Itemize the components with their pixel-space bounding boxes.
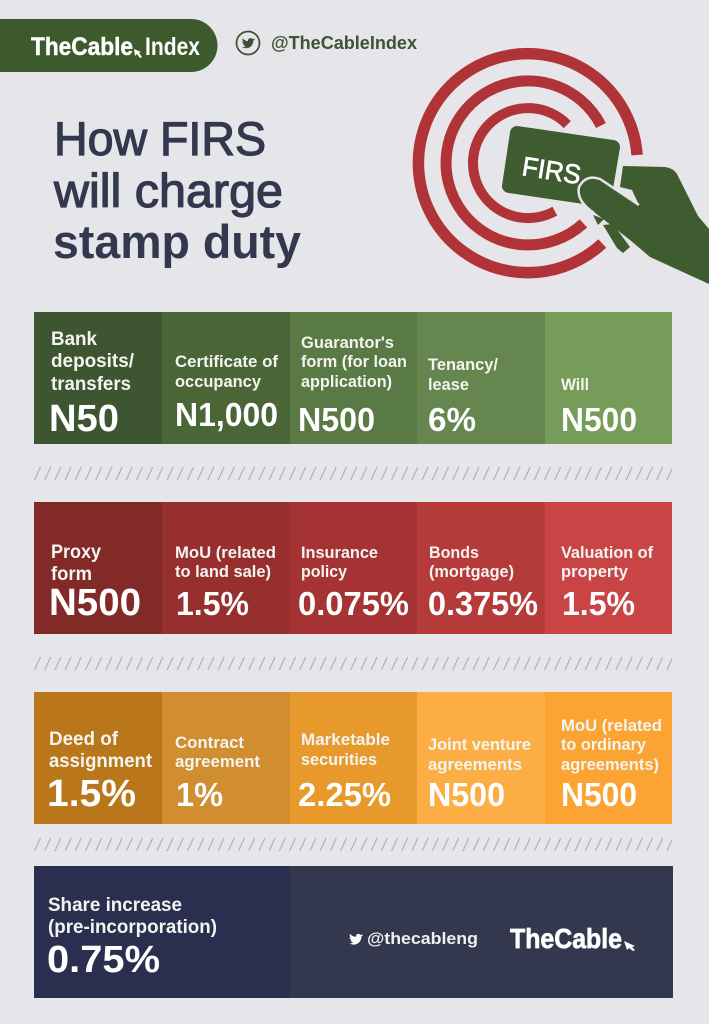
cell: valuation of property: 1.5% <box>562 585 635 622</box>
cell: bank deposits: transfers <box>51 374 131 395</box>
cell: certificate of occupancy: Certificate of <box>175 353 279 371</box>
footer twitter handle: @thecableng <box>367 929 478 948</box>
cell: MoU land sale: to land sale) <box>175 563 271 581</box>
cell: guarantor's form: application) <box>301 373 392 391</box>
cell: MoU ordinary agreements <box>561 717 662 813</box>
hatch divider 2 <box>34 656 672 671</box>
cell: joint venture agreements: agreements <box>428 756 522 774</box>
cell: insurance policy: Insurance <box>301 544 378 562</box>
cell: share increase: (pre-incorporation) <box>48 917 217 938</box>
cell: bank deposits: N50 <box>49 398 119 440</box>
cell: certificate of occupancy <box>175 353 279 433</box>
header badge: TheCable Index: TheCable <box>31 33 133 61</box>
cell: MoU land sale: MoU (related <box>175 544 276 562</box>
red signal rings <box>418 54 637 273</box>
cell: MoU ordinary agreements: agreements) <box>561 756 659 774</box>
cell: will: N500 <box>561 401 637 438</box>
cell: MoU land sale <box>175 544 276 622</box>
cell: contract agreement <box>175 734 261 813</box>
title: will charge <box>53 164 283 217</box>
cell: marketable securities <box>298 731 391 813</box>
cell: insurance policy <box>298 544 409 622</box>
cell: share increase: 0.75% <box>47 939 160 981</box>
header badge: TheCable Index: Index <box>145 33 200 61</box>
cell: deed of assignment: assignment <box>49 751 153 772</box>
cell: proxy form: Proxy <box>51 542 101 563</box>
title <box>53 112 301 268</box>
panel: green row <box>34 312 672 444</box>
hatch divider 1 <box>34 466 672 481</box>
title: stamp duty <box>53 215 301 268</box>
panel: orange row <box>34 692 672 824</box>
cell: bonds: 0.375% <box>428 585 538 622</box>
cell: tenancy/lease: lease <box>428 376 469 394</box>
cell: bonds <box>428 544 538 622</box>
header badge: TheCable Index <box>0 19 218 72</box>
cell: bank deposits: deposits/ <box>51 351 135 372</box>
cell: deed of assignment: 1.5% <box>47 773 136 815</box>
cell: certificate of occupancy: N1,000 <box>175 396 278 433</box>
hatch divider 3 <box>34 837 672 852</box>
cell: valuation of property: Valuation of <box>561 544 653 562</box>
cell: tenancy/lease: 6% <box>428 401 476 438</box>
cell: contract agreement: agreement <box>175 753 261 771</box>
panel: navy footer row <box>34 866 673 998</box>
cell: marketable securities: securities <box>301 751 377 769</box>
cell: MoU ordinary agreements: MoU (related <box>561 717 662 735</box>
cell: tenancy/lease <box>428 356 498 438</box>
cell: guarantor's form: N500 <box>298 401 375 438</box>
cell: bank deposits <box>49 329 135 440</box>
cell: share increase <box>47 895 217 981</box>
cell: MoU ordinary agreements: to ordinary <box>561 736 647 754</box>
cell: will: Will <box>561 376 589 394</box>
cell: joint venture agreements: N500 <box>428 776 505 813</box>
cell: deed of assignment <box>47 729 153 815</box>
cell: will <box>561 376 637 438</box>
cell: MoU ordinary agreements: N500 <box>561 776 637 813</box>
cell: insurance policy: policy <box>301 563 348 581</box>
green card: FIRS <box>520 151 583 190</box>
cell: insurance policy: 0.075% <box>298 585 409 622</box>
twitter handle: @TheCableIndex: @TheCableIndex <box>271 33 417 53</box>
cell: MoU land sale: 1.5% <box>176 585 249 622</box>
cell: contract agreement: 1% <box>176 776 223 813</box>
title: How FIRS <box>54 112 266 165</box>
cell: valuation of property <box>561 544 653 622</box>
cell: deed of assignment: Deed of <box>49 729 119 750</box>
cell: joint venture agreements <box>428 736 531 813</box>
green card <box>509 133 613 200</box>
cell: share increase: Share increase <box>48 895 182 916</box>
cell: tenancy/lease: Tenancy/ <box>428 356 498 374</box>
cell: proxy form: form <box>51 564 92 585</box>
cell: marketable securities: 2.25% <box>298 776 391 813</box>
cell: bonds: (mortgage) <box>429 563 514 581</box>
cell: contract agreement: Contract <box>175 734 245 752</box>
cell: proxy form <box>49 542 141 624</box>
cell: bank deposits: Bank <box>51 329 97 350</box>
cell: marketable securities: Marketable <box>301 731 390 749</box>
panel: red row <box>34 502 672 634</box>
hand <box>579 166 709 284</box>
cell: valuation of property: property <box>561 563 629 581</box>
cell: proxy form: N500 <box>49 582 141 624</box>
cell: joint venture agreements: Joint venture <box>428 736 531 754</box>
cell: certificate of occupancy: occupancy <box>175 373 262 391</box>
cell: guarantor's form <box>298 334 407 438</box>
cell: bonds: Bonds <box>429 544 479 562</box>
illustration: hand holding FIRS card with contactless rings <box>418 54 709 284</box>
cell: guarantor's form: Guarantor's <box>301 334 394 352</box>
cell: guarantor's form: form (for loan <box>301 353 407 371</box>
footer logo: TheCable: TheCable <box>510 923 622 954</box>
